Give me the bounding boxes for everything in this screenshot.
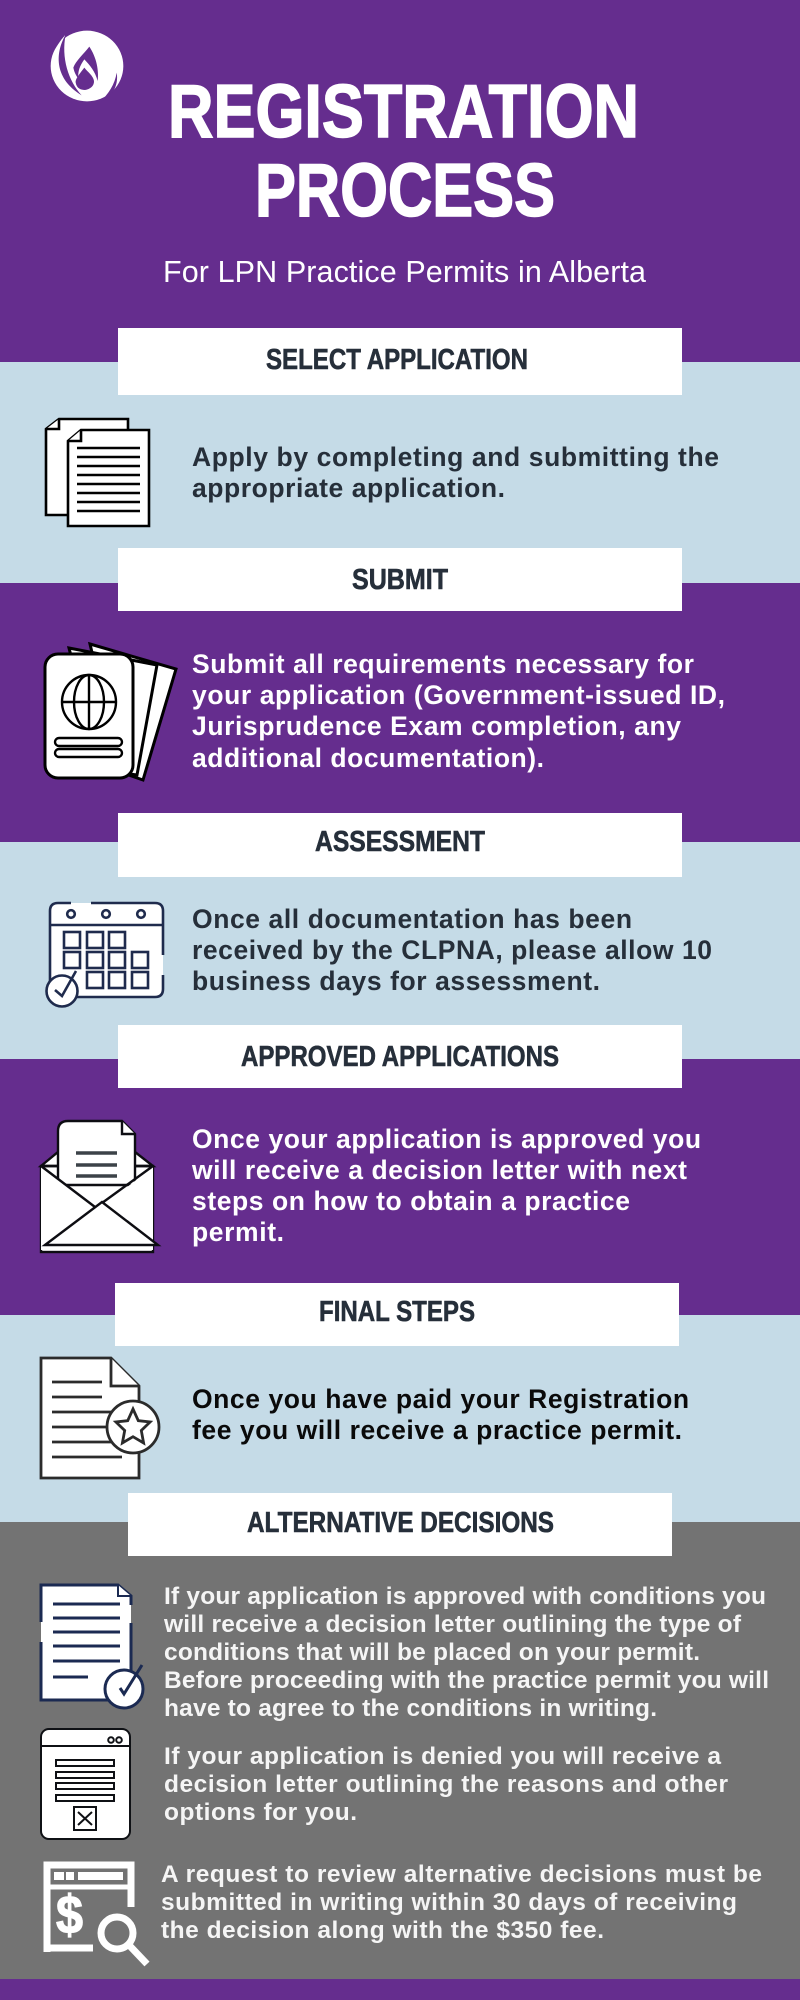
text: assessment: business days for assessment. xyxy=(192,966,600,996)
text: conditions: Before proceeding with the practice permit you will xyxy=(164,1667,769,1694)
icon: conditions document xyxy=(41,1584,143,1708)
heading: submit: SUBMIT xyxy=(352,564,448,596)
text: conditions: conditions that will be placed on your permit. xyxy=(164,1639,700,1666)
text: submit: your application (Government-issued ID, xyxy=(192,680,725,710)
text: conditions xyxy=(163,1583,769,1722)
text: approved applications: permit. xyxy=(192,1217,284,1247)
icon: flame logo xyxy=(51,31,123,102)
text: review request xyxy=(161,1861,762,1944)
text: denied: decision letter outlining the reasons and other xyxy=(164,1771,728,1798)
heading: approved applications xyxy=(118,1025,682,1088)
text: review request: the decision along with the $350 fee. xyxy=(161,1917,604,1944)
text: denied: If your application is denied you will receive a xyxy=(164,1743,721,1770)
title: PROCESS xyxy=(255,148,555,232)
icon: document with star xyxy=(41,1358,159,1478)
text: select application: Apply by completing and submitting the xyxy=(192,442,719,472)
icon: passport xyxy=(45,644,176,780)
text: review request: A request to review alternative decisions must be xyxy=(161,1861,762,1888)
text: denied: options for you. xyxy=(164,1799,357,1826)
title xyxy=(168,69,639,232)
text: submit: additional documentation). xyxy=(192,743,544,773)
text: assessment xyxy=(192,904,712,996)
heading: final steps: FINAL STEPS xyxy=(319,1296,475,1328)
icon: review fee magnifier xyxy=(47,1865,147,1964)
icon: envelope with letter xyxy=(41,1121,158,1252)
icon: documents xyxy=(46,419,149,526)
text: approved applications: Once your application is approved you xyxy=(192,1124,701,1154)
text: select application: appropriate application. xyxy=(192,473,505,503)
icon: review fee magnifier: $ xyxy=(56,1885,83,1945)
icon: calendar xyxy=(46,903,163,1006)
panel: submit xyxy=(0,548,800,842)
text: approved applications xyxy=(191,1124,701,1247)
subtitle: For LPN Practice Permits in Alberta xyxy=(163,255,646,289)
heading: alternative decisions: ALTERNATIVE DECISIONS xyxy=(247,1507,554,1539)
text: conditions: If your application is approved with conditions you xyxy=(164,1583,766,1610)
heading: select application: SELECT APPLICATION xyxy=(266,344,528,376)
text: final steps: fee you will receive a practice permit. xyxy=(192,1415,682,1445)
heading: select application xyxy=(118,328,682,395)
text: submit: Submit all requirements necessary for xyxy=(192,649,694,679)
icon: denied form xyxy=(41,1729,130,1839)
text: conditions: will receive a decision letter outlining the type of xyxy=(163,1611,742,1638)
panel: alternative decisions xyxy=(0,1493,800,1979)
heading: assessment: ASSESSMENT xyxy=(315,826,485,858)
text: final steps xyxy=(192,1384,689,1445)
panel: approved applications xyxy=(0,1025,800,1315)
panel: select application xyxy=(0,328,800,583)
text: denied xyxy=(164,1743,728,1826)
panel: assessment xyxy=(0,813,800,1060)
heading: final steps xyxy=(115,1283,679,1346)
heading: assessment xyxy=(118,813,682,877)
text: conditions: have to agree to the conditions in writing. xyxy=(164,1695,657,1722)
heading: submit xyxy=(118,548,682,611)
text: assessment: Once all documentation has been xyxy=(192,904,632,934)
heading: approved applications: APPROVED APPLICATIONS xyxy=(241,1041,559,1073)
text: approved applications: will receive a decision letter with next xyxy=(191,1155,687,1185)
text: final steps: Once you have paid your Registration xyxy=(192,1384,689,1414)
text: submit xyxy=(192,649,725,773)
title: REGISTRATION xyxy=(168,69,639,153)
heading: alternative decisions xyxy=(128,1493,672,1556)
footer band xyxy=(0,1979,800,2000)
panel: final steps xyxy=(0,1283,800,1522)
text: approved applications: steps on how to obtain a practice xyxy=(192,1186,630,1216)
text: select application xyxy=(192,442,719,503)
text: submit: Jurisprudence Exam completion, any xyxy=(192,711,681,741)
text: assessment: received by the CLPNA, please allow 10 xyxy=(192,935,712,965)
text: review request: submitted in writing within 30 days of receiving xyxy=(161,1889,737,1916)
